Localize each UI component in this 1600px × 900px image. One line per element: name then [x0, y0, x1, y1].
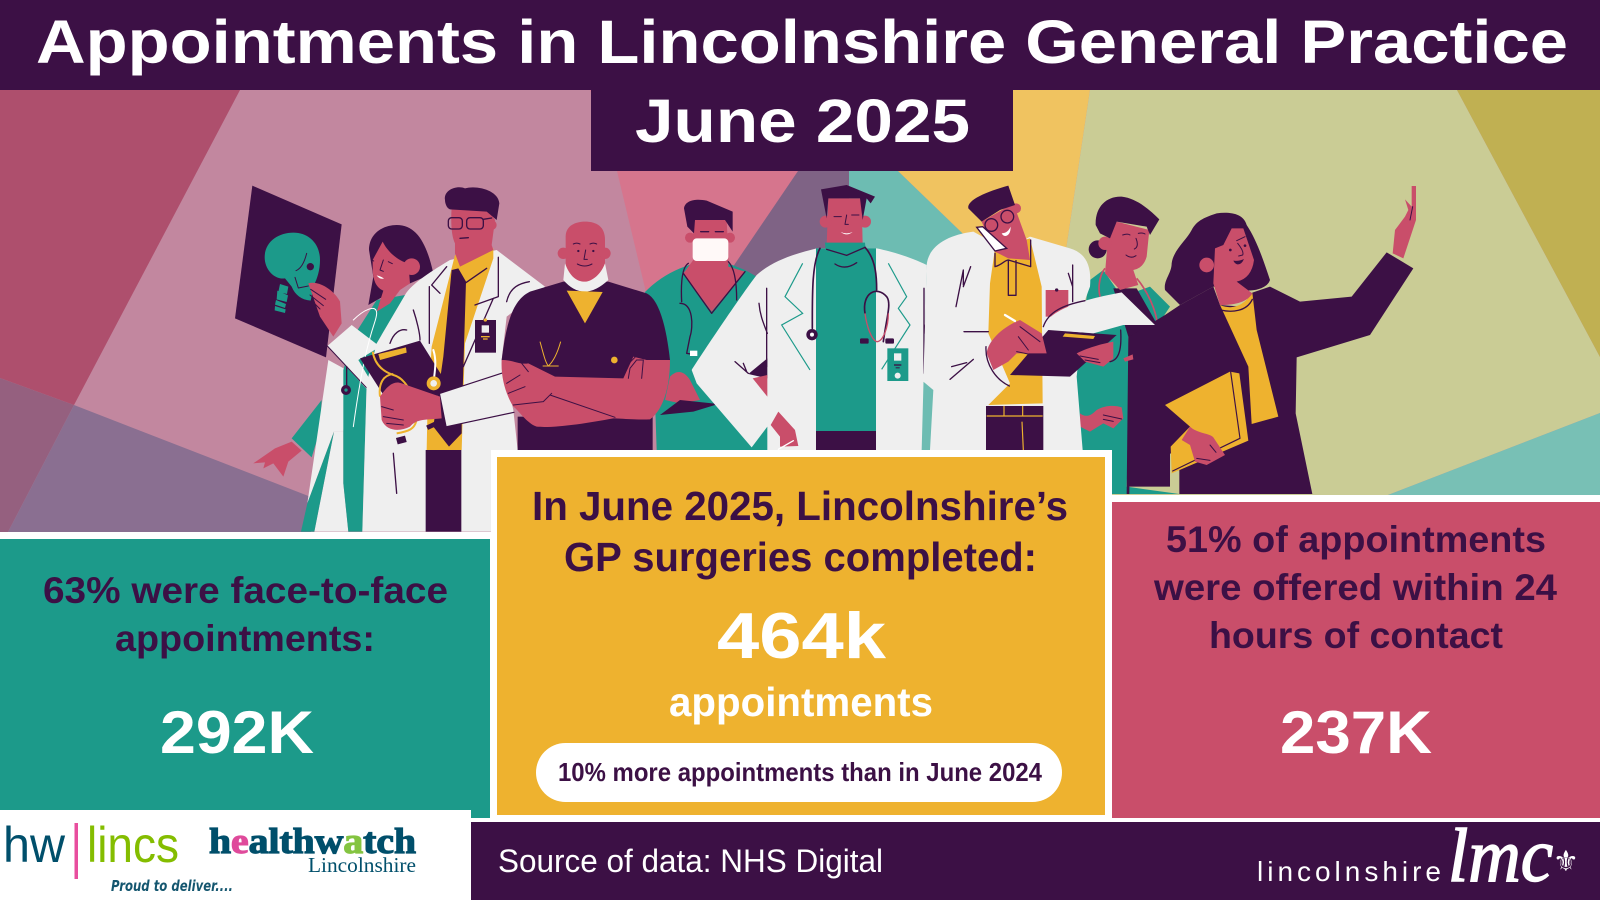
logo panel: hw lincs and Healthwatch: hw [3, 817, 66, 873]
panel: offered within 24 hours: were offered within 24 [1153, 567, 1557, 608]
logo: Lincolnshire LMC: lmc [1448, 814, 1553, 898]
illustration: female doctor holding x-ray [253, 225, 433, 532]
panel: face-to-face appointments: 63% were face-to-face [43, 570, 448, 611]
panel: offered within 24 hours: hours of contact [1209, 615, 1503, 656]
panel: face-to-face appointments: appointments: [115, 618, 375, 659]
footer band with source [471, 822, 1600, 900]
panel: total appointments: In June 2025, Lincolnshire’s [532, 483, 1068, 529]
background: angular colour shards [0, 90, 1600, 540]
illustration: male doctor with tie and clipboard [360, 187, 545, 532]
footer band with source: Source of data: NHS Digital [498, 843, 883, 879]
panel: face-to-face appointments: 292K [160, 699, 314, 766]
illustration: x-ray film with skull [235, 186, 342, 357]
panel: total appointments [491, 450, 1112, 822]
title box: date [591, 85, 1013, 171]
panel: face-to-face appointments [0, 532, 491, 822]
panel: offered within 24 hours: 237K [1280, 699, 1432, 766]
panel: total appointments: GP surgeries completed: [564, 534, 1037, 580]
illustration: businesswoman waving with yellow folder [1127, 186, 1416, 494]
logo: Lincolnshire LMC: lincolnshire [1257, 856, 1441, 887]
panel: total appointments: 10% more appointments than in June 2024 [558, 757, 1042, 787]
logo: Lincolnshire LMC [1257, 814, 1579, 898]
illustration: bald doctor with crossed arms [502, 222, 670, 532]
illustration: masked surgeon in green scrubs [645, 200, 780, 450]
title: Appointments in Lincolnshire General Practice [36, 8, 1568, 76]
logo panel: hw lincs and Healthwatch: healthwatch [209, 821, 416, 861]
logo panel: hw lincs and Healthwatch: Lincolnshire [308, 853, 416, 877]
title: date text: June 2025 [635, 87, 970, 155]
panel: offered within 24 hours: 51% of appointments [1166, 519, 1546, 560]
illustration: doctor on phone with clipboard [923, 186, 1155, 450]
panel: offered within 24 hours [1112, 495, 1600, 822]
header band [0, 0, 1600, 90]
logo: Lincolnshire LMC: ⚜ [1553, 844, 1579, 878]
panel: total appointments: 464k [717, 599, 887, 672]
logo panel: hw lincs and Healthwatch: Proud to deliver.... [111, 877, 233, 895]
illustration: nurse in teal scrubs [1075, 197, 1179, 494]
panel: total appointments: appointments [669, 679, 933, 725]
logo panel: hw lincs and Healthwatch [0, 810, 471, 900]
logo panel: hw lincs and Healthwatch: lincs [87, 817, 179, 873]
illustration: central doctor in white coat with stethoscope [692, 185, 933, 450]
